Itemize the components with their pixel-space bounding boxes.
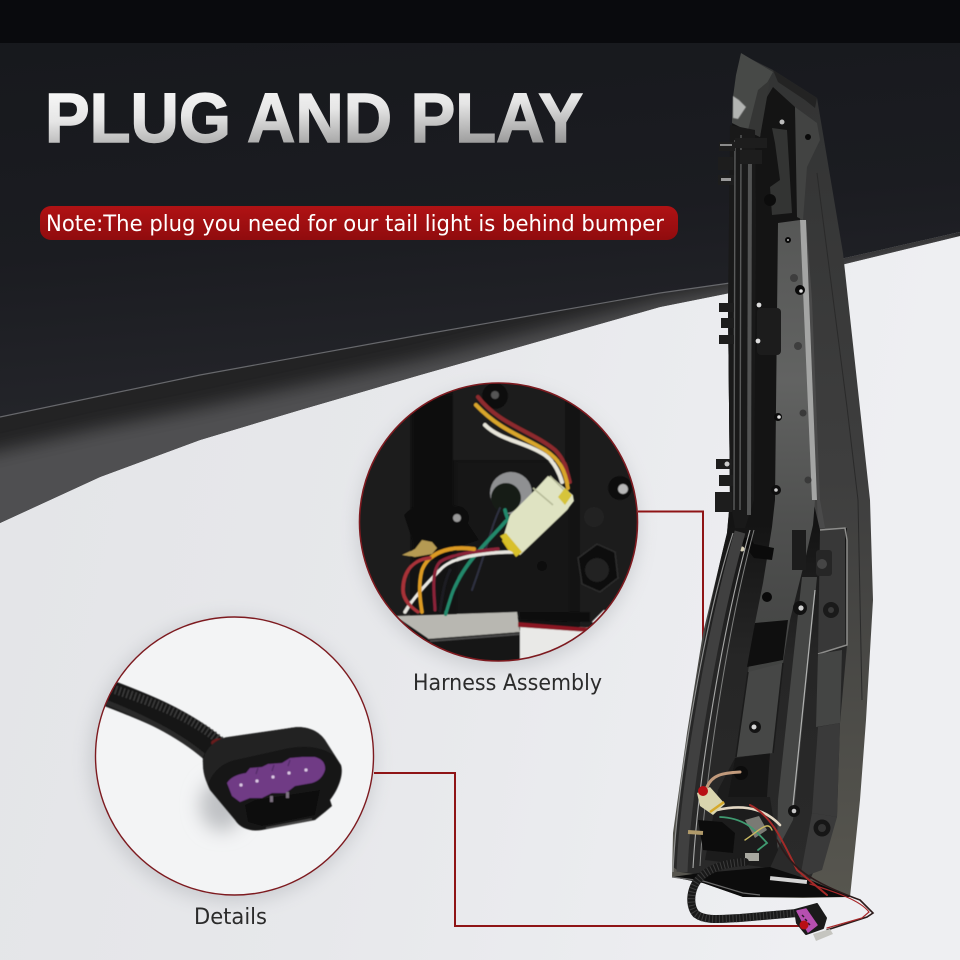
terminal xyxy=(402,540,437,557)
top cap xyxy=(732,53,773,137)
curved side rails xyxy=(673,533,733,872)
photo circle: details xyxy=(96,617,374,895)
dark block upper xyxy=(747,620,788,667)
upper cavity bracket xyxy=(770,128,792,215)
circle shadows xyxy=(90,388,638,902)
marker dot: harness assembly xyxy=(698,786,708,796)
dark block lower xyxy=(728,753,770,797)
interior lower dark xyxy=(705,758,778,868)
purple insert xyxy=(227,757,325,802)
right lower panels xyxy=(818,528,845,654)
light strip xyxy=(800,220,817,500)
wires xyxy=(403,397,570,614)
connector body xyxy=(203,727,342,831)
right body shading xyxy=(817,173,862,700)
grey socket xyxy=(490,472,532,514)
lower black housing xyxy=(672,867,850,897)
left clips middle xyxy=(719,303,734,344)
background: dark swoosh band xyxy=(0,232,960,523)
connector lines xyxy=(374,512,803,926)
label: Harness Assembly: Harness Assembly xyxy=(413,671,602,696)
harness plug xyxy=(795,904,826,934)
wiring in tail light xyxy=(691,772,873,930)
label: Details: Details xyxy=(194,905,267,930)
left rail xyxy=(728,125,756,528)
left clips upper xyxy=(718,138,767,185)
white barcode label xyxy=(770,876,807,884)
tail light photo xyxy=(672,53,873,941)
small black box xyxy=(698,820,735,853)
left clips lower xyxy=(715,459,733,512)
note banner: Note:The plug you need for our tail light is behind bumper xyxy=(46,212,665,237)
centre grey panel xyxy=(736,220,815,757)
dark block on panel xyxy=(757,308,781,355)
cream connector xyxy=(503,476,574,555)
connector bottom latch xyxy=(245,790,320,826)
title: PLUG AND PLAY xyxy=(45,79,583,157)
red tape xyxy=(210,738,222,745)
cream connector xyxy=(697,787,725,815)
lower vertical strip xyxy=(777,577,817,850)
cable xyxy=(100,690,218,752)
photo circle: harness assembly xyxy=(355,380,645,665)
inner black frame xyxy=(673,87,847,880)
mounting details xyxy=(816,550,832,576)
background: top black strip xyxy=(0,0,960,43)
top right rim xyxy=(773,70,817,108)
bolts xyxy=(608,476,632,500)
connector shadow xyxy=(200,779,244,831)
background: thin swoosh line xyxy=(0,283,730,417)
marker dot: details xyxy=(800,920,808,930)
bottom label xyxy=(395,612,520,640)
tail light outer housing xyxy=(672,54,873,898)
background: dark upper area xyxy=(0,0,960,417)
